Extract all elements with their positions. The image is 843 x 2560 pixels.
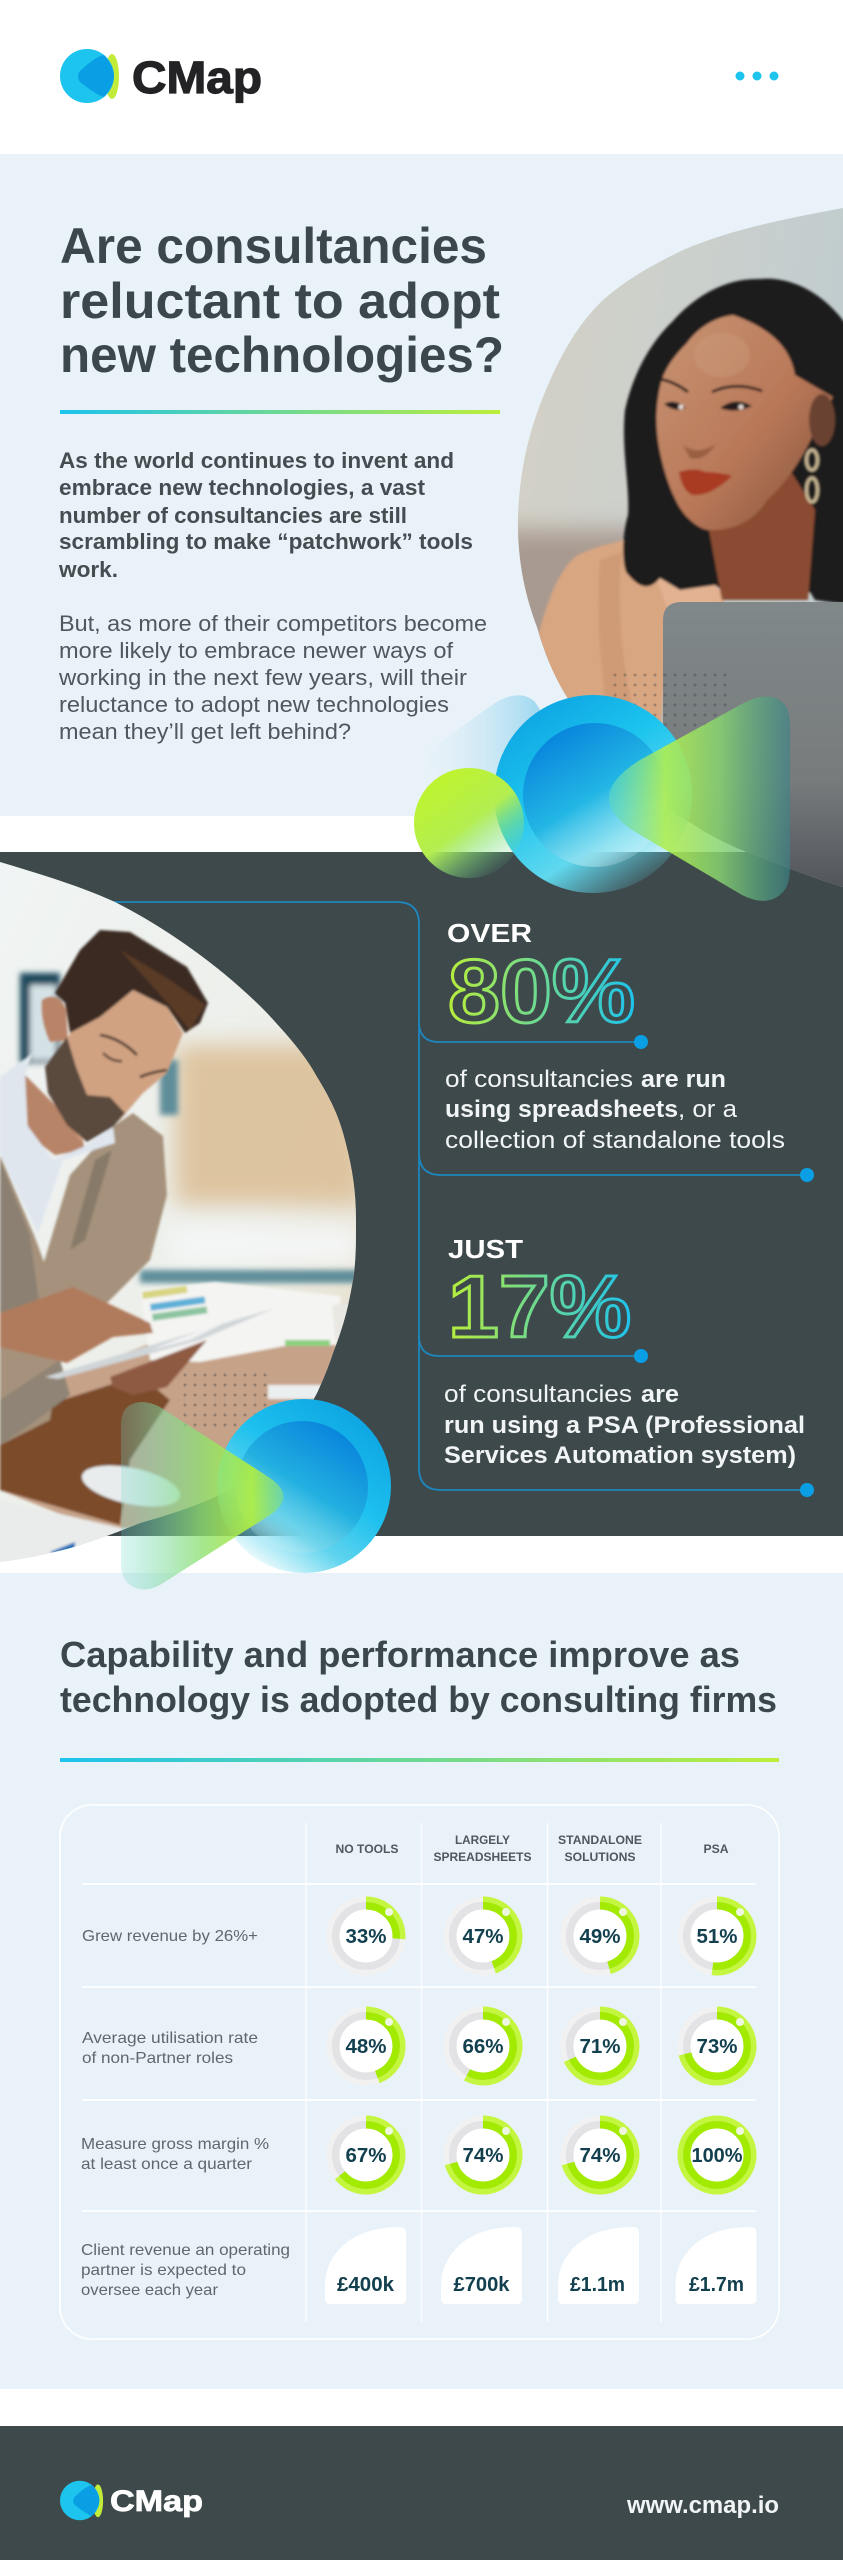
- desk: [4, 1344, 336, 1530]
- title: [60, 218, 504, 383]
- decorative shapes: top cluster: [414, 695, 790, 901]
- stat: just 17%: JUST: [448, 1234, 523, 1264]
- table row labels: of non-Partner roles: [82, 2050, 233, 2067]
- intro bold paragraph: embrace new technologies, a vast: [59, 475, 426, 500]
- stat: over 80%: OVER: [447, 918, 532, 948]
- donut 47%: [446, 1899, 520, 1973]
- table card: [60, 1805, 779, 2339]
- shape: lime circle: [414, 768, 524, 878]
- connector lines: [100, 902, 807, 1490]
- shape: green triangle: [609, 696, 790, 901]
- stat description: PSA: run using a PSA (Professional: [444, 1412, 805, 1439]
- intro bold paragraph: scrambling to make “patchwork” tools: [59, 529, 473, 554]
- donut 74%: [446, 2118, 520, 2192]
- donut 51%: [680, 1899, 754, 1973]
- intro bold paragraph: work.: [58, 557, 118, 582]
- donut 100%: 100%: [692, 2145, 743, 2167]
- stat description: spreadsheets: using spreadsheets: [445, 1096, 678, 1123]
- hair: [55, 930, 208, 1033]
- stat description: spreadsheets: [445, 1066, 785, 1154]
- donut 47%: 47%: [462, 1926, 504, 1948]
- ear: [42, 997, 68, 1042]
- stat description: PSA: of consultancies: [444, 1381, 632, 1408]
- section gradient rule: [60, 1758, 779, 1762]
- table row labels: [81, 1928, 290, 2299]
- stat description: PSA: are: [641, 1381, 679, 1408]
- earring: [806, 450, 818, 502]
- intro regular paragraph: [58, 611, 487, 744]
- decorative shapes: lower cluster: [121, 1399, 391, 1590]
- revenue values: £400k: [337, 2274, 395, 2296]
- shape: blue inner circle: [523, 723, 667, 867]
- panel: footer background: [0, 2426, 843, 2560]
- table row labels: oversee each year: [81, 2282, 219, 2299]
- intro bold paragraph: [58, 448, 473, 582]
- eyes and brows: [100, 1035, 167, 1077]
- footer url: www.cmap.io: [626, 2492, 779, 2519]
- icon: menu dots: [736, 72, 778, 80]
- section heading: technology is adopted by consulting firms: [60, 1679, 777, 1720]
- intro regular paragraph: mean they’ll get left behind?: [59, 719, 351, 744]
- shape: blue ring: [217, 1399, 391, 1573]
- panel: statistics background: [0, 852, 843, 1536]
- revenue tiles: [325, 2227, 756, 2304]
- donut 74%: 74%: [462, 2145, 504, 2167]
- donut 49%: 49%: [580, 1926, 621, 1948]
- donut 73%: [680, 2009, 754, 2083]
- brows and eyes: [660, 379, 762, 392]
- revenue values: £1.7m: [689, 2274, 744, 2296]
- shirt: [0, 1053, 115, 1233]
- stat description: spreadsheets: collection of standalone tools: [445, 1127, 785, 1154]
- table row labels: at least once a quarter: [81, 2156, 253, 2173]
- intro regular paragraph: But, as more of their competitors become: [59, 611, 487, 636]
- donut 49%: [563, 1899, 637, 1973]
- hair: [623, 279, 843, 605]
- donut 74% standalone: 74%: [580, 2145, 621, 2167]
- beard: [45, 1037, 125, 1142]
- papers: [140, 1282, 345, 1362]
- photo: woman with laptop: [518, 208, 843, 887]
- face: [656, 315, 833, 530]
- donut 67%: 67%: [346, 2145, 387, 2167]
- photo: man with tablet: [0, 860, 365, 1570]
- title: Are consultancies: [60, 218, 487, 274]
- table row labels: Measure gross margin %: [81, 2136, 269, 2153]
- table column headers: STANDALONE: [558, 1833, 642, 1847]
- section heading: Capability and performance improve as: [60, 1634, 740, 1675]
- title: new technologies?: [60, 327, 504, 383]
- table column headers: SPREADSHEETS: [434, 1850, 532, 1864]
- neck: [25, 1075, 85, 1155]
- lips: [679, 470, 732, 495]
- donut 66%: 66%: [462, 2036, 504, 2058]
- table column headers: [336, 1833, 729, 1864]
- neck: [708, 470, 815, 600]
- panel: capability table background: [0, 1573, 843, 2389]
- donut 33%: [329, 1899, 403, 1973]
- intro regular paragraph: working in the next few years, will their: [58, 665, 467, 690]
- stat: over 80%: 80%: [448, 942, 635, 1042]
- nose shadow: [683, 444, 716, 459]
- blouse: [537, 540, 730, 730]
- mouse: [80, 1463, 181, 1508]
- intro bold paragraph: number of consultancies are still: [59, 503, 407, 528]
- cardigan: [0, 1113, 167, 1445]
- donut 67%: [329, 2118, 403, 2192]
- donut 33%: 33%: [346, 1926, 387, 1948]
- forehead and cheek highlight: [698, 335, 748, 376]
- donut 51%: 51%: [696, 1926, 738, 1948]
- donut 48%: 48%: [346, 2036, 387, 2058]
- footer logo: [60, 2481, 203, 2520]
- face: [66, 988, 184, 1140]
- header logo: [60, 49, 262, 103]
- title gradient rule: [60, 410, 500, 414]
- laptop: [663, 602, 843, 900]
- panel: intro background: [0, 154, 843, 816]
- donut charts: grew revenue: [329, 1899, 754, 2192]
- ear: [809, 394, 835, 446]
- header logo: CMap: [132, 52, 262, 103]
- table row labels: Average utilisation rate: [82, 2030, 258, 2047]
- table row labels: partner is expected to: [81, 2262, 246, 2279]
- table column headers: NO TOOLS: [336, 1842, 398, 1856]
- intro regular paragraph: more likely to embrace newer ways of: [59, 638, 454, 663]
- table column headers: SOLUTIONS: [564, 1850, 636, 1864]
- stat description: PSA: Services Automation system): [444, 1442, 796, 1469]
- connector dots: [634, 1035, 814, 1497]
- donut 71%: [563, 2009, 637, 2083]
- table row labels: Grew revenue by 26%+: [82, 1928, 258, 1945]
- tablet: [45, 1308, 275, 1379]
- table column headers: PSA: [704, 1842, 729, 1856]
- stat description: PSA: [444, 1381, 805, 1469]
- shape: pale blue triangle: [415, 695, 550, 800]
- stat description: spreadsheets: of consultancies: [445, 1066, 633, 1093]
- cup: [332, 1301, 349, 1344]
- revenue values: £1.1m: [570, 2274, 625, 2296]
- shape: green triangle: [121, 1402, 284, 1590]
- donut 71%: 71%: [580, 2036, 621, 2058]
- revenue values: [337, 2274, 744, 2296]
- footer logo: CMap: [110, 2485, 203, 2518]
- hands: [0, 1287, 153, 1363]
- shape: blue ring: [494, 695, 692, 893]
- donut 66%: [446, 2009, 520, 2083]
- intro regular paragraph: reluctance to adopt new technologies: [59, 692, 449, 717]
- revenue values: £700k: [454, 2274, 510, 2296]
- intro bold paragraph: As the world continues to invent and: [59, 448, 454, 473]
- donut 100%: [680, 2118, 754, 2192]
- donut 48%: [329, 2009, 403, 2083]
- table row labels: Client revenue an operating: [81, 2242, 290, 2259]
- section heading: [60, 1634, 777, 1720]
- donut 73%: 73%: [696, 2036, 738, 2058]
- table column headers: LARGELY: [455, 1833, 510, 1847]
- title: reluctant to adopt: [60, 273, 500, 329]
- table grid: [82, 1823, 756, 2322]
- donut 74% standalone: [563, 2118, 637, 2192]
- stat description: spreadsheets: , or a: [678, 1096, 738, 1123]
- stat description: spreadsheets: are run: [641, 1066, 726, 1093]
- stat: just 17%: 17%: [448, 1257, 631, 1356]
- shape: blue inner circle: [236, 1421, 368, 1553]
